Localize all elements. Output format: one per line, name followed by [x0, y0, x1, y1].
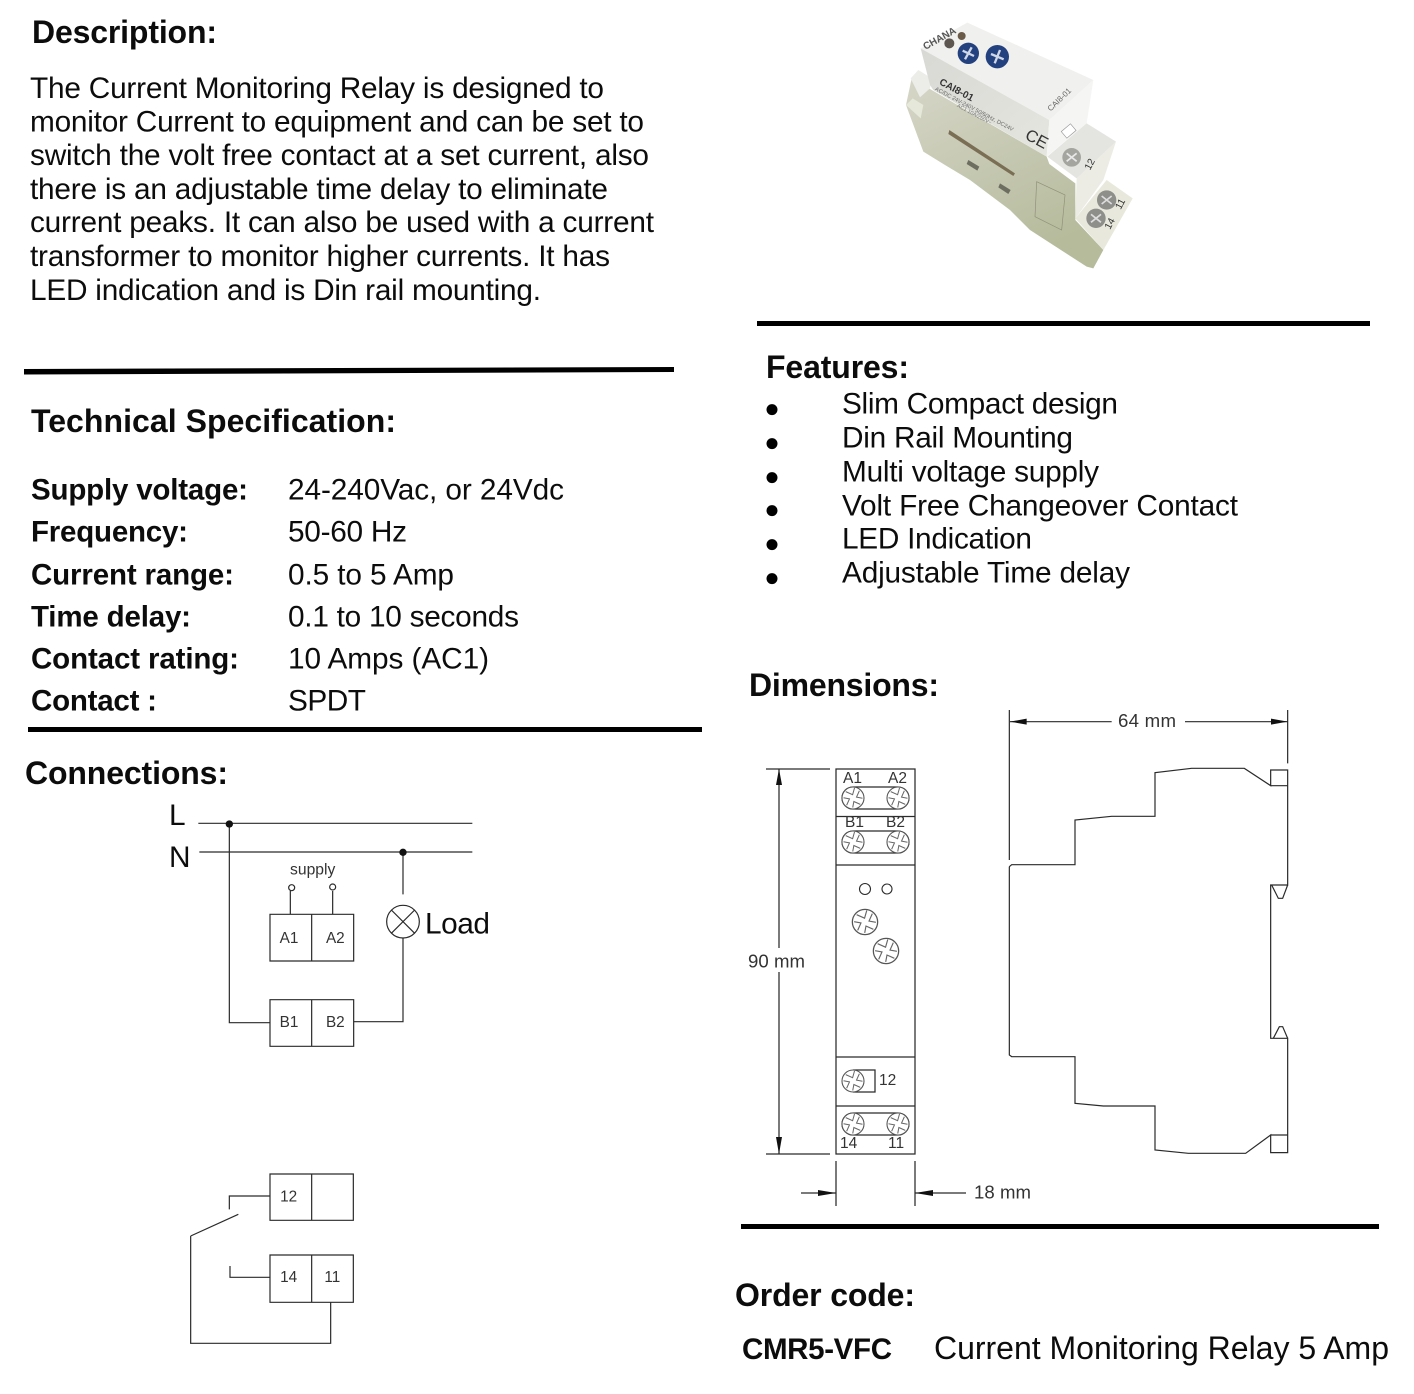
features list: Din Rail Mounting — [842, 421, 1073, 454]
technical specification table: Time delay: — [31, 600, 191, 633]
wiring diagram: changeover contact: 11 — [324, 1269, 340, 1286]
technical specification table: 0.1 to 10 seconds — [288, 600, 519, 633]
description text — [30, 72, 655, 307]
dimension drawing: front view: 14 — [840, 1135, 858, 1152]
dimension drawing: front view — [748, 769, 1031, 1206]
product photo: din rail relay: CAI8-01 — [937, 77, 976, 104]
wiring diagram: supply and load: supply — [290, 862, 335, 879]
technical specification table: 50-60 Hz — [288, 515, 407, 548]
wiring diagram: supply and load: B1 — [280, 1014, 298, 1031]
product photo: din rail relay: AC1 10A/250V~ — [956, 103, 992, 126]
technical specification table: Contact : — [31, 684, 157, 717]
description text: monitor Current to equipment and can be set to — [30, 105, 644, 138]
wiring diagram: changeover contact: 14 — [280, 1269, 298, 1286]
product photo: din rail relay: CE — [1022, 125, 1051, 153]
features list: Adjustable Time delay — [842, 556, 1130, 589]
description text: current peaks. It can also be used with a current — [30, 206, 655, 239]
features list — [766, 387, 1239, 589]
wiring diagram: changeover contact — [191, 1174, 353, 1343]
technical specification table: 10 Amps (AC1) — [288, 642, 489, 675]
dimension drawing: front view: B2 — [886, 814, 905, 831]
wiring diagram: supply and load — [198, 820, 472, 1046]
order code row: Current Monitoring Relay 5 Amp — [934, 1330, 1389, 1366]
wiring diagram: changeover contact: 12 — [280, 1189, 297, 1206]
description text: there is an adjustable time delay to eliminate — [30, 173, 608, 206]
heading: features: Features: — [766, 349, 909, 385]
features list: Slim Compact design — [842, 387, 1118, 420]
technical specification table: 0.5 to 5 Amp — [288, 558, 454, 591]
dimension drawing: front view: B1 — [845, 814, 864, 831]
label: 64 mm: 64 mm — [1118, 710, 1176, 731]
description text: transformer to monitor higher currents. It has — [30, 240, 610, 273]
product photo: din rail relay: 14 — [1103, 216, 1118, 231]
label: N: N — [169, 841, 191, 874]
technical specification table: Current range: — [31, 558, 234, 591]
wiring diagram: supply and load: B2 — [326, 1014, 345, 1031]
wiring diagram: supply and load: A2 — [326, 930, 345, 947]
features list: Multi voltage supply — [842, 455, 1099, 488]
features list: Volt Free Changeover Contact — [842, 489, 1239, 522]
heading: order code: Order code: — [735, 1277, 915, 1313]
description text: switch the volt free contact at a set current, also — [30, 139, 649, 172]
label: 90 mm: 90 mm — [748, 950, 805, 972]
technical specification table: Frequency: — [31, 515, 188, 548]
product photo: din rail relay: 12 — [1083, 157, 1098, 172]
product photo: din rail relay: AC/DC 24V-240V 50/60Hz, DC24V — [934, 86, 1014, 133]
technical specification table: 24-240Vac, or 24Vdc — [288, 473, 564, 506]
technical specification table: Contact rating: — [31, 642, 239, 675]
product photo: din rail relay: CAI8-01 — [1046, 86, 1074, 113]
heading: dimensions: Dimensions: — [749, 667, 939, 703]
technical specification table: SPDT — [288, 684, 366, 717]
technical specification table — [31, 473, 564, 717]
dimension drawing: front view: A2 — [888, 770, 907, 787]
label: L: L — [169, 799, 186, 832]
dimension drawing: front view: A1 — [843, 770, 862, 787]
heading: description: Description: — [32, 14, 217, 50]
description text: The Current Monitoring Relay is designed to — [30, 72, 604, 105]
dimension drawing: front view: 12 — [879, 1072, 896, 1089]
description text: LED indication and is Din rail mounting. — [30, 274, 541, 307]
wiring diagram: supply and load: A1 — [280, 930, 298, 947]
heading: connections: Connections: — [25, 755, 228, 791]
dimension drawing: front view: 11 — [888, 1135, 904, 1152]
technical specification table: Supply voltage: — [31, 473, 248, 506]
dimension drawing: side profile — [1009, 710, 1288, 1153]
label: load: Load — [425, 907, 490, 940]
product photo: din rail relay — [906, 23, 1133, 268]
order code row: CMR5-VFC — [742, 1333, 892, 1366]
heading: technical specification: Technical Specification: — [31, 403, 396, 439]
product photo: din rail relay: 11 — [1114, 197, 1128, 211]
features list: LED Indication — [842, 522, 1032, 555]
label: 18 mm: 18 mm — [974, 1182, 1031, 1203]
product photo: din rail relay: CHANA — [921, 26, 958, 53]
